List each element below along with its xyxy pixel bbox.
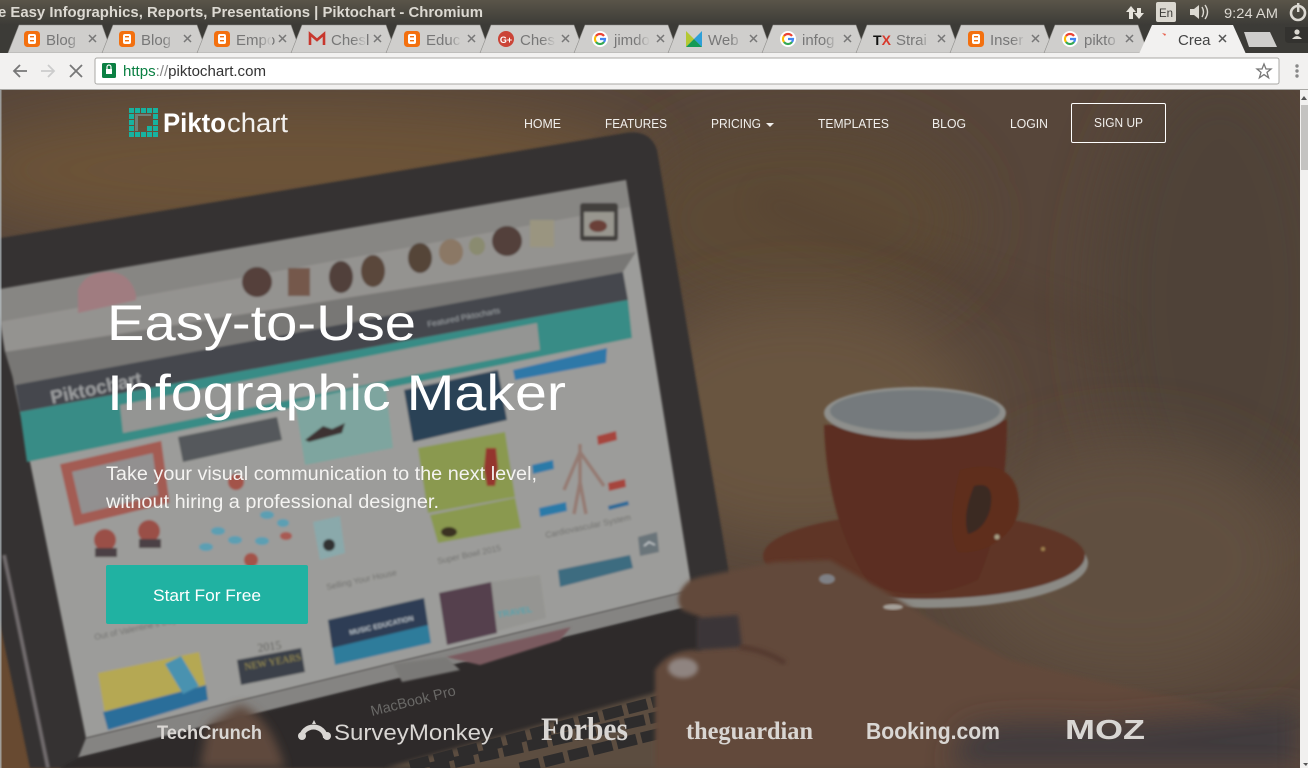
laptop left edge	[4, 555, 48, 768]
tab: Google piktochart: pikto	[1084, 32, 1116, 49]
photo: coffee cup and saucer	[763, 387, 1088, 608]
thumbnail captions: Out of Valentine's Day	[93, 615, 178, 642]
address bar: https://piktochart.com	[123, 64, 266, 80]
blue ribbon	[558, 555, 633, 587]
title bar: e Easy Infographics, Reports, Presentations | Piktochart - Chromium	[0, 5, 483, 21]
tab: Google infographic: infog	[802, 32, 835, 49]
nav links: TEMPLATES	[818, 117, 889, 131]
tab strip	[0, 25, 1308, 54]
logo icon	[129, 108, 158, 137]
tab: Google piktochart	[1044, 25, 1148, 53]
tab: Webnode	[668, 25, 772, 53]
tab: Empowering: Empo	[236, 32, 275, 49]
new tab button	[1244, 32, 1277, 47]
tab: Blogger 2	[102, 25, 207, 53]
headline	[107, 295, 566, 421]
cup body	[823, 420, 1008, 522]
nav links: FEATURES	[605, 117, 667, 131]
laptop screen	[0, 180, 692, 738]
dark gray card	[178, 417, 282, 462]
Piktochart logo: Pikto	[163, 108, 226, 138]
tab: Empowering	[197, 25, 301, 53]
Piktochart logo: chart	[227, 108, 289, 138]
tab: Straight: TX	[873, 32, 892, 48]
system tray	[1126, 2, 1305, 22]
logo: TechCrunch: TechCrunch	[157, 723, 262, 744]
navigation bar	[129, 104, 1166, 142]
toolbar	[0, 53, 1308, 90]
laptop lid bezel	[0, 132, 742, 768]
address bar	[95, 58, 1279, 84]
active tab: Create: Crea	[1178, 32, 1211, 49]
tab: Straight: Strai	[896, 32, 927, 49]
cup rim	[824, 387, 1006, 439]
key between fingers	[697, 615, 742, 650]
top row food thumbnails	[242, 203, 618, 297]
tab: Education	[386, 25, 490, 53]
tab: Straight	[856, 25, 960, 53]
tab: Google jimdo	[574, 25, 678, 53]
headline: Easy-to-Use	[107, 295, 416, 351]
laptop	[0, 132, 760, 768]
browser window chrome	[0, 0, 1308, 90]
browser address bar	[0, 207, 636, 352]
site dark header	[15, 272, 628, 412]
thumbnail captions: Cardiovascular System	[544, 512, 632, 540]
cup handle	[991, 472, 1020, 544]
sign up button	[1072, 104, 1166, 142]
logo: MOZ: MOZ	[1065, 714, 1145, 745]
subheading: Take your visual communication to the next level,	[106, 464, 537, 485]
fingernails	[883, 604, 903, 610]
finger crease	[740, 647, 785, 663]
cardiovascular card	[513, 348, 629, 517]
icon: back arrow	[14, 65, 27, 77]
Safari menu bar	[0, 180, 630, 322]
tab: Blogger 1: Blog	[46, 32, 76, 49]
nav links	[524, 117, 1048, 131]
icon: forward arrow	[41, 65, 54, 77]
profile button	[1285, 27, 1308, 43]
on-screen featured label: Featured Piktocharts	[427, 306, 501, 329]
green cards	[418, 432, 521, 543]
logo: SurveyMonkey: SurveyMonkey	[334, 720, 493, 745]
tab: Blogger 1	[8, 25, 112, 53]
tab: Gmail	[291, 25, 396, 53]
travel card	[438, 581, 534, 646]
pink character thumbnail	[78, 272, 136, 313]
laptop hinge strip	[78, 590, 700, 758]
red frame card	[66, 447, 164, 520]
back-to-top button	[638, 532, 659, 556]
subheading: without hiring a professional designer.	[105, 492, 439, 513]
nav links: LOGIN	[1010, 117, 1048, 131]
thumbnail captions	[93, 512, 632, 642]
headline: Infographic Maker	[107, 365, 566, 421]
tab: Webnode: Web	[708, 32, 739, 49]
pale teal card	[295, 382, 393, 465]
tab: Google jimdo: jimdo	[613, 32, 650, 49]
call to action button	[106, 565, 308, 624]
nav links: PRICING	[711, 117, 761, 131]
active tab: Create	[1139, 25, 1246, 54]
photo: hands	[200, 560, 1300, 768]
passport card	[98, 652, 208, 730]
dark sleeve	[950, 708, 1300, 768]
tab: Google Plus: Ches	[520, 32, 555, 49]
navy card	[404, 370, 507, 442]
tab: Blogger 2: Blog	[141, 32, 171, 49]
tab: Insert	[950, 25, 1054, 53]
sign up button: SIGN UP	[1094, 116, 1143, 130]
page scrollbar	[1300, 90, 1308, 768]
saucer	[763, 513, 1088, 608]
saucer sheen	[994, 534, 1000, 540]
laptop lower bezel	[62, 608, 683, 768]
new years card	[237, 638, 305, 685]
icon: menu dots	[1295, 64, 1299, 78]
travel card: TRAVEL	[497, 604, 534, 620]
new years card: NEW YEARS	[244, 652, 302, 673]
Piktochart logo	[129, 108, 289, 138]
data blobs	[199, 474, 292, 567]
site teal banner	[20, 300, 632, 462]
music education card: MUSIC EDUCATION	[349, 615, 414, 637]
logo: the guardian: theguardian	[686, 718, 813, 745]
ring	[819, 574, 835, 584]
tab: Education: Educ	[426, 32, 461, 49]
nav links: HOME	[524, 117, 561, 131]
MacBook Pro label: MacBook Pro	[369, 683, 457, 720]
title bar	[0, 0, 1308, 25]
tab: Google Plus: G+	[500, 35, 512, 45]
right hand	[655, 560, 1300, 768]
keyboard	[385, 660, 760, 768]
nav links: BLOG	[932, 117, 966, 131]
banner search box	[120, 323, 540, 433]
new years card: 2015	[256, 638, 282, 655]
call to action button: Start For Free	[153, 586, 261, 605]
avatars	[94, 520, 161, 557]
tab: Insert: Inser	[990, 32, 1023, 49]
subheading	[105, 464, 537, 513]
tab: Google infographic	[762, 25, 866, 53]
portrait card	[313, 516, 345, 560]
thumbnail captions: Selling Your House	[325, 567, 398, 592]
system tray: 9:24 AM	[1224, 5, 1278, 21]
left finger	[200, 705, 285, 768]
tab: Gmail: Chesl	[331, 32, 369, 49]
system tray: En	[1159, 8, 1173, 20]
logo: Booking.com: Booking.com	[866, 718, 1000, 744]
music education card	[328, 598, 431, 665]
tab: Google Plus	[480, 25, 584, 53]
on-screen Piktochart logo: Piktochart	[49, 369, 145, 409]
thumbnail captions: Super Bowl 2015	[436, 543, 502, 566]
icon: stop loading	[70, 65, 82, 77]
left window edge	[0, 90, 2, 768]
logo: Forbes: Forbes	[541, 712, 628, 748]
press logos	[157, 712, 1145, 748]
